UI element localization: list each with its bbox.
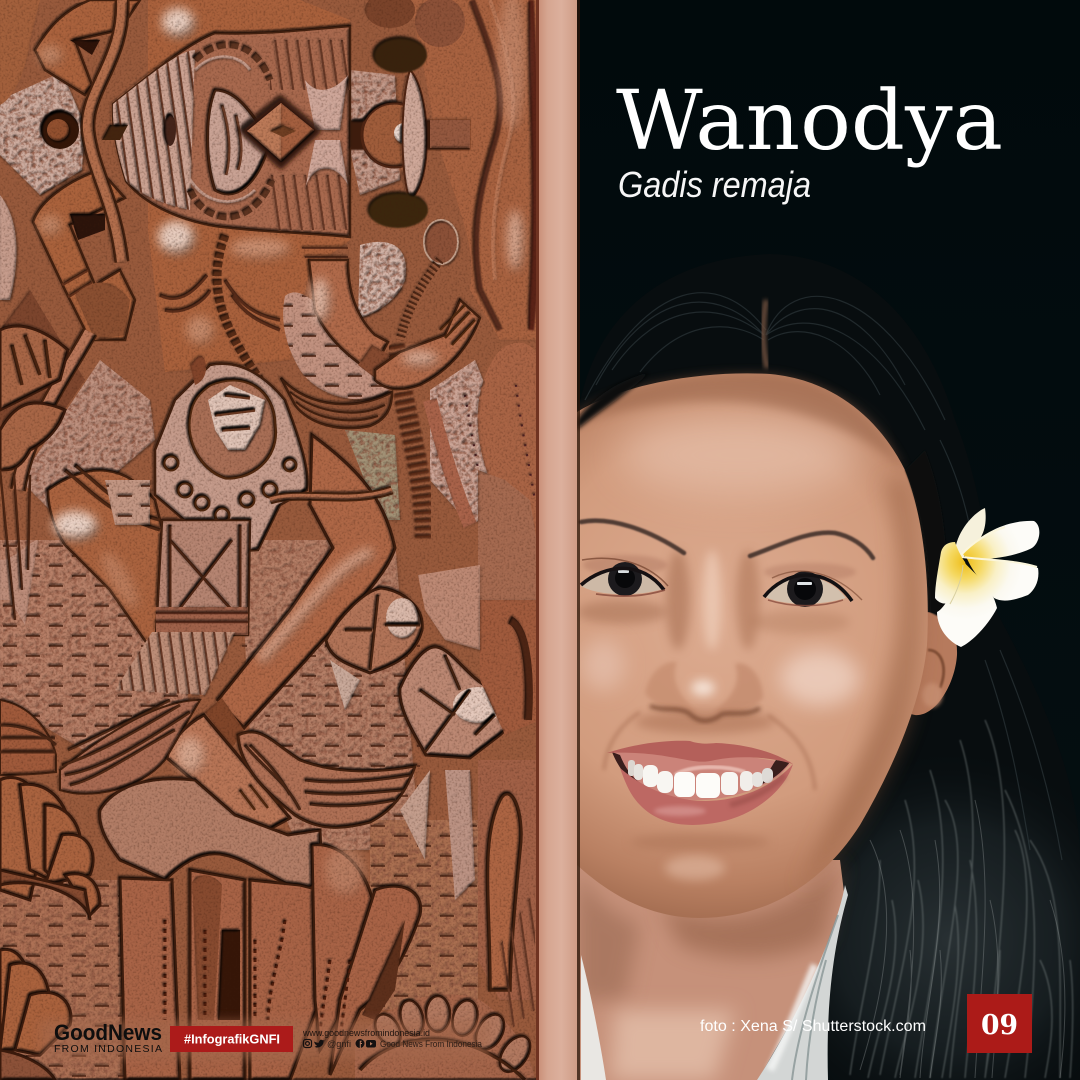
mouth [607, 741, 793, 825]
icon: twitter [314, 1040, 324, 1048]
photo: woman with hair [577, 254, 1080, 1080]
left thigh [48, 465, 165, 645]
upper arm and bow [18, 0, 140, 490]
right eye [764, 563, 862, 607]
nose [645, 662, 763, 721]
social links: @gnfi [327, 1039, 351, 1049]
face shading [577, 373, 922, 890]
soft ground under footer logos [40, 1020, 490, 1060]
title: Wanodya [616, 73, 1003, 169]
right leg and foot [167, 435, 395, 836]
icon: youtube [366, 1040, 376, 1048]
white shirt [581, 885, 848, 1080]
left eye [581, 555, 668, 596]
demon mask ornament [102, 26, 350, 237]
icon: facebook [356, 1039, 364, 1048]
lower lip [620, 764, 793, 825]
platform and drapery drips [100, 779, 421, 1080]
left carved fans [0, 0, 100, 1080]
waist sash ornament [155, 356, 308, 552]
dark photo background [577, 0, 1080, 1080]
icon: frangipani flower [935, 508, 1039, 647]
teeth [628, 760, 773, 798]
hashtag badge [170, 1026, 293, 1052]
page number badge [967, 994, 1032, 1053]
central hanging cloth [115, 520, 250, 695]
cloth fans at the feet [0, 700, 415, 827]
social links [302, 1028, 482, 1049]
stray hair over temple [577, 372, 947, 620]
recessed relief background [0, 70, 506, 1080]
torso [148, 0, 350, 380]
upper lip [607, 741, 793, 764]
bottom right scroll [355, 994, 536, 1080]
logo: GoodNews from Indonesia [54, 1020, 162, 1055]
eyebrows [581, 521, 873, 558]
page number badge: 09 [981, 1010, 1018, 1041]
door frame post [536, 0, 580, 1080]
right side motifs [418, 470, 540, 1030]
right vertical wave band [388, 0, 536, 540]
social links: www.goodnewsfromindonesia.id [302, 1028, 430, 1038]
carved leaves [326, 588, 510, 900]
neck and chest [577, 860, 845, 1080]
subtitle: Gadis remaja [618, 164, 811, 205]
hashtag badge: #InfografikGNFI [184, 1032, 280, 1046]
photo credit: foto : Xena S/ Shutterstock.com [700, 1018, 926, 1035]
mouth interior [612, 752, 790, 800]
rosette and arrow tip [340, 0, 470, 228]
carved wood door panel [0, 0, 540, 1080]
ear [912, 612, 958, 716]
hair mass [577, 254, 1080, 1080]
face [577, 373, 928, 918]
wood grain texture [0, 0, 540, 1080]
social links: Good News From Indonesia [380, 1039, 482, 1049]
logo: GoodNews from Indonesia: GoodNews [54, 1020, 162, 1045]
mask nose diamond [238, 96, 322, 170]
logo: GoodNews from Indonesia: FROM INDONESIA [54, 1043, 162, 1055]
icon: instagram [304, 1040, 312, 1048]
right arm, scale shield and hand [281, 260, 480, 428]
